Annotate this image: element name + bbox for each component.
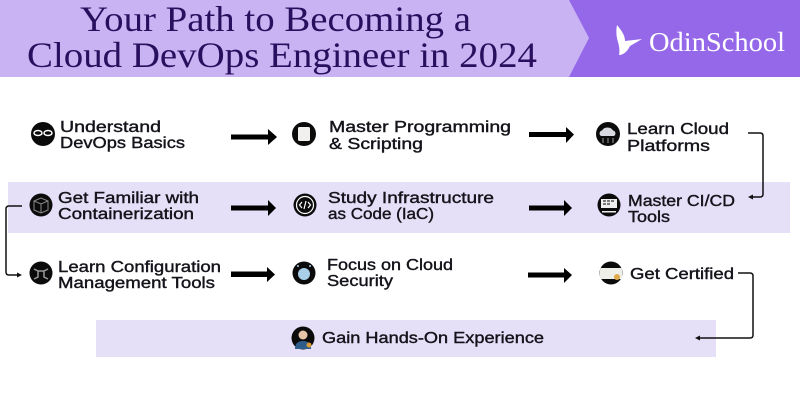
header banner	[0, 0, 800, 77]
title: Cloud DevOps Engineer in 2024	[27, 35, 537, 75]
step: Get Familiar with Containerization: Get Familiar with	[58, 190, 199, 207]
step: Learn Configuration Management Tools: Learn Configuration	[58, 259, 221, 276]
arrow	[231, 200, 276, 216]
title	[27, 0, 537, 75]
step: Understand DevOps Basics: Understand	[60, 119, 161, 136]
connector: platforms to CI/CD	[748, 133, 763, 200]
logo: OdinSchool: OdinSchool	[649, 27, 785, 57]
step: Gain Hands-On Experience	[292, 326, 544, 350]
step: Study Infrastructure as Code (IaC): Study Infrastructure	[328, 190, 494, 207]
step: Understand DevOps Basics	[31, 119, 185, 152]
step: Focus on Cloud Security	[292, 257, 453, 290]
step: Study Infrastructure as Code (IaC)	[294, 190, 494, 223]
band: row 2	[8, 182, 790, 233]
step: Get Familiar with Containerization: Containerization	[58, 206, 194, 223]
step: Gain Hands-On Experience: Gain Hands-On Experience	[322, 330, 544, 347]
step: Learn Configuration Management Tools: Management Tools	[58, 275, 215, 292]
step: Master Programming & Scripting: Master Programming	[329, 119, 511, 136]
step: Focus on Cloud Security: Focus on Cloud	[327, 257, 453, 274]
step: Get Certified: Get Certified	[630, 266, 734, 283]
connector: certified to hands-on	[695, 273, 753, 340]
step: Get Certified	[600, 262, 734, 284]
step: Understand DevOps Basics: DevOps Basics	[60, 135, 185, 152]
step: Master CI/CD Tools: Master CI/CD	[628, 193, 735, 210]
arrow	[528, 268, 572, 283]
step: Learn Cloud Platforms	[596, 121, 729, 155]
step: Learn Cloud Platforms: Platforms	[627, 138, 710, 155]
band: row 4	[96, 320, 716, 357]
step: Master Programming & Scripting	[292, 119, 511, 153]
step: Focus on Cloud Security: Security	[327, 273, 393, 290]
step: Master CI/CD Tools	[598, 193, 735, 226]
arrow	[231, 129, 277, 145]
arrow	[231, 267, 275, 282]
step: Study Infrastructure as Code (IaC): as Code (IaC)	[328, 206, 434, 223]
arrow	[529, 127, 574, 143]
arrow	[529, 200, 572, 216]
step: Get Familiar with Containerization	[30, 190, 199, 223]
step: Master CI/CD Tools: Tools	[628, 209, 670, 226]
step: Learn Configuration Management Tools	[30, 259, 221, 292]
connector: containerization to configuration	[6, 206, 22, 278]
step: Learn Cloud Platforms: Learn Cloud	[627, 121, 729, 138]
step: Master Programming & Scripting: & Scripting	[329, 136, 423, 153]
title: Your Path to Becoming a	[80, 0, 471, 39]
